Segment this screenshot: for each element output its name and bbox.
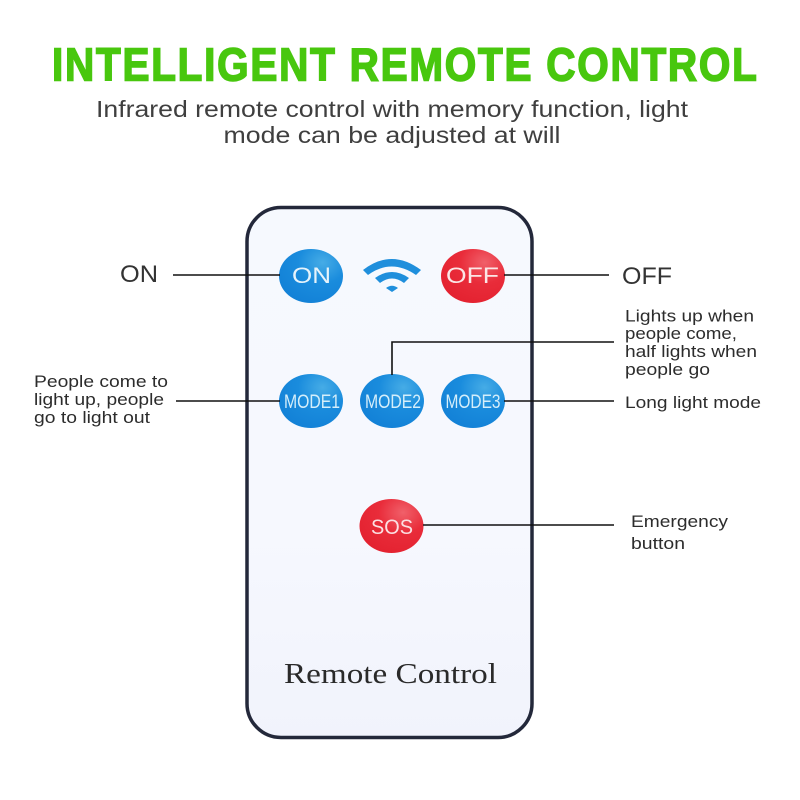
button: ON [279, 249, 343, 303]
leader line: MODE3 [504, 400, 614, 402]
label: MODE2 description [625, 308, 757, 379]
label: MODE2 description: half lights when [625, 343, 757, 361]
leader line: MODE1 [176, 400, 280, 402]
leader line: MODE2 [392, 342, 614, 375]
button: MODE2: MODE2 [365, 392, 421, 413]
label: SOS description: button [631, 535, 685, 553]
label: MODE1 description [34, 373, 168, 427]
label: MODE2 description: Lights up when [625, 308, 754, 326]
label: MODE2 description: people come, [625, 325, 737, 343]
leader line: OFF [504, 274, 609, 276]
button: MODE3 [441, 374, 505, 428]
button: OFF: OFF [446, 263, 499, 288]
label: MODE2 description: people go [625, 361, 710, 379]
label: SOS description: Emergency [631, 513, 729, 531]
button: OFF [441, 249, 505, 303]
title: INTELLIGENT REMOTE CONTROL [52, 40, 757, 91]
label: SOS description [631, 513, 729, 553]
subtitle: Infrared remote control with memory function, light [96, 96, 689, 122]
leader line: ON [173, 274, 280, 276]
button: SOS [360, 499, 424, 553]
remote control body [247, 208, 532, 738]
button: MODE2 [360, 374, 424, 428]
button: MODE3: MODE3 [446, 392, 500, 413]
label: MODE3 description: Long light mode [625, 394, 761, 412]
button: SOS: SOS [371, 516, 413, 539]
label: MODE1 description: light up, people [34, 391, 164, 409]
subtitle: mode can be adjusted at will [224, 122, 560, 148]
label: MODE1 description: go to light out [34, 409, 150, 427]
button: MODE1 [279, 374, 343, 428]
remote control label: Remote Control [284, 659, 497, 690]
label: MODE1 description: People come to [34, 373, 168, 391]
leader line: SOS [423, 524, 614, 526]
icon: wifi signal [363, 259, 421, 292]
subtitle [96, 96, 689, 148]
label: OFF: OFF [622, 263, 672, 290]
label: ON: ON [120, 261, 158, 288]
button: ON: ON [292, 263, 331, 288]
button: MODE1: MODE1 [284, 392, 340, 413]
